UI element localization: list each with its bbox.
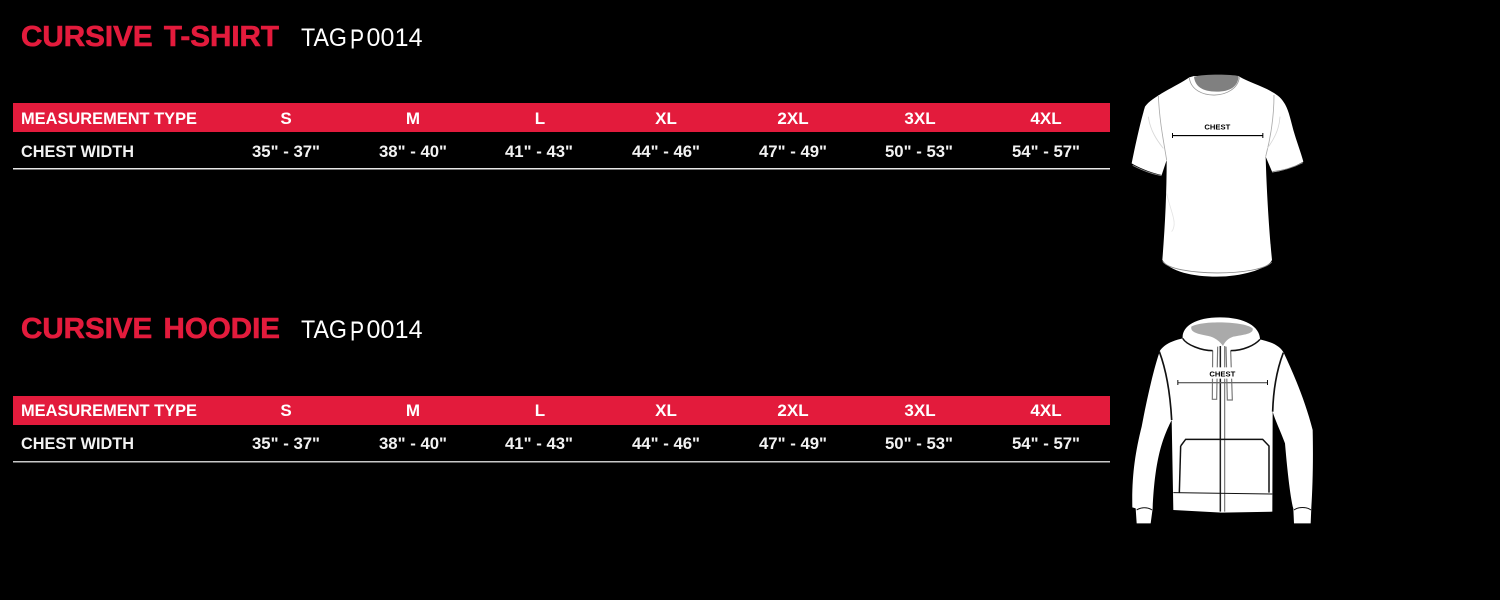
table header row: 4XL	[1030, 109, 1062, 128]
table row: chest width: 44" - 46"	[632, 434, 700, 453]
table header row: XL	[655, 109, 677, 128]
table header row: MEASUREMENT TYPE	[21, 401, 197, 420]
table row: chest width: 41" - 43"	[505, 142, 573, 161]
table row: chest width: 50" - 53"	[885, 142, 953, 161]
table header row: MEASUREMENT TYPE	[21, 109, 197, 128]
product code: TAG	[301, 24, 347, 52]
table header row: L	[535, 109, 545, 128]
table row: chest width: CHEST WIDTH	[21, 142, 134, 161]
product code: P	[350, 24, 364, 54]
table row: chest width: 50" - 53"	[885, 434, 953, 453]
table row: chest width: 38" - 40"	[379, 434, 447, 453]
product code: 0014	[366, 316, 423, 344]
heading: cursive hoodie: CURSIVE HOODIE	[21, 313, 280, 345]
table header row: 3XL	[904, 109, 936, 128]
panel: hoodie size chart	[13, 313, 1110, 462]
product code	[301, 316, 423, 346]
icon: hoodie diagram	[1132, 317, 1313, 523]
table header row: 4XL	[1030, 401, 1062, 420]
table header row: 2XL	[777, 109, 809, 128]
table row: chest width: 35" - 37"	[252, 434, 320, 453]
table header row: S	[280, 109, 292, 128]
table row: chest width: 44" - 46"	[632, 142, 700, 161]
table row: chest width: 41" - 43"	[505, 434, 573, 453]
table row: chest width	[13, 142, 1110, 170]
product code: TAG	[301, 316, 347, 344]
table row: chest width: 54" - 57"	[1012, 142, 1080, 161]
table header row: XL	[655, 401, 677, 420]
icon: t-shirt diagram	[1132, 75, 1303, 277]
table header row: 2XL	[777, 401, 809, 420]
product code	[301, 24, 423, 54]
table header row: M	[406, 401, 420, 420]
table row: chest width: 54" - 57"	[1012, 434, 1080, 453]
table header row: S	[280, 401, 292, 420]
table header row	[13, 103, 1110, 132]
table row: chest width: 47" - 49"	[759, 142, 827, 161]
table header row: M	[406, 109, 420, 128]
heading: cursive t-shirt: CURSIVE T-SHIRT	[21, 21, 280, 53]
table header row	[13, 396, 1110, 425]
table row: chest width: 38" - 40"	[379, 142, 447, 161]
table row: chest width: CHEST WIDTH	[21, 434, 134, 453]
icon: t-shirt diagram: CHEST	[1204, 123, 1231, 132]
icon: hoodie diagram: CHEST	[1209, 369, 1236, 378]
table row: chest width: 47" - 49"	[759, 434, 827, 453]
panel: t-shirt size chart	[13, 21, 1110, 170]
table header row: L	[535, 401, 545, 420]
table row: chest width: 35" - 37"	[252, 142, 320, 161]
table header row: 3XL	[904, 401, 936, 420]
table row: chest width	[13, 434, 1110, 462]
product code: 0014	[366, 24, 423, 52]
product code: P	[350, 316, 364, 346]
